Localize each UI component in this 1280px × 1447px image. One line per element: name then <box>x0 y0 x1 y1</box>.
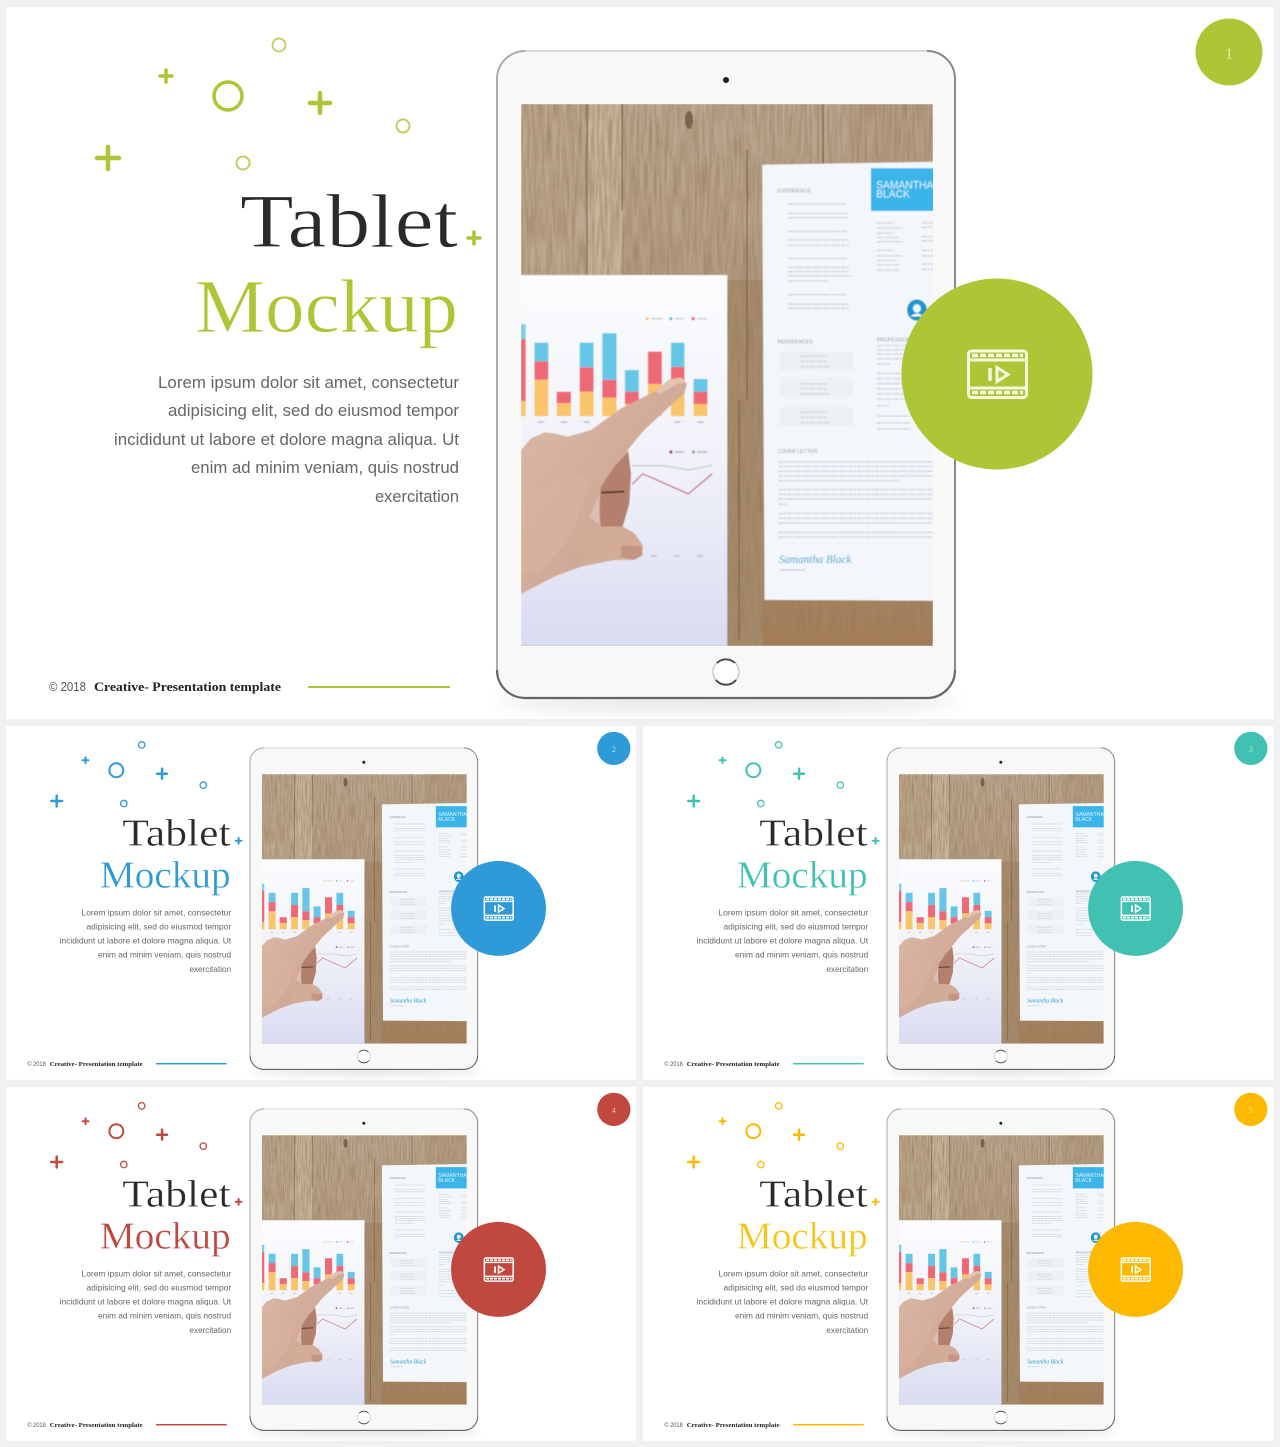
footer <box>49 679 450 694</box>
body text <box>697 907 869 974</box>
footer: Creative- Presentation template <box>687 1061 780 1068</box>
title: Mockup <box>737 855 868 897</box>
panel: teal slide <box>643 726 1273 1080</box>
panel: blue slide <box>6 726 636 1080</box>
title: Tablet <box>122 1173 231 1215</box>
title <box>100 1173 231 1258</box>
body text: adipisicing elit, sed do eiusmod tempor <box>87 921 231 931</box>
body text: adipisicing elit, sed do eiusmod tempor <box>724 921 868 931</box>
title: Tablet <box>122 812 231 854</box>
body text: Lorem ipsum dolor sit amet, consectetur <box>158 373 459 392</box>
page number badge <box>1234 732 1267 765</box>
title: Mockup <box>100 855 231 897</box>
body text: enim ad minim veniam, quis nostrud <box>98 1311 231 1321</box>
body text: exercitation <box>189 964 231 974</box>
footer: Creative- Presentation template <box>687 1422 780 1429</box>
body text: exercitation <box>375 487 459 506</box>
body text: exercitation <box>189 1325 231 1335</box>
body text: incididunt ut labore et dolore magna aliqua. Ut <box>60 936 232 946</box>
body text: incididunt ut labore et dolore magna aliqua. Ut <box>697 936 869 946</box>
play circle with film icon <box>902 278 1092 470</box>
page number badge: 3 <box>1249 745 1253 754</box>
page number badge <box>1196 18 1262 86</box>
tablet mockup <box>250 748 480 1076</box>
decorative circles and plus signs <box>51 742 242 844</box>
footer: Creative- Presentation template <box>50 1422 143 1429</box>
play circle with film icon <box>1088 1222 1183 1317</box>
body text: incididunt ut labore et dolore magna aliqua. Ut <box>114 430 459 449</box>
page number badge: 2 <box>612 745 616 754</box>
body text: exercitation <box>826 964 868 974</box>
tablet mockup <box>250 1109 480 1437</box>
play circle with film icon <box>451 1222 546 1317</box>
footer: © 2018 <box>49 679 86 694</box>
panel: yellow slide <box>643 1087 1273 1441</box>
panel: main green slide <box>6 7 1274 719</box>
footer: © 2018 <box>664 1060 683 1068</box>
body text <box>60 1268 232 1335</box>
tablet mockup <box>887 748 1117 1076</box>
body text: adipisicing elit, sed do eiusmod tempor <box>87 1282 231 1292</box>
page number badge: 4 <box>612 1106 616 1115</box>
title: Tablet <box>240 180 458 264</box>
footer <box>664 1060 864 1068</box>
title: Mockup <box>737 1216 868 1258</box>
body text: exercitation <box>826 1325 868 1335</box>
footer <box>664 1421 864 1429</box>
decorative circles and plus signs <box>97 38 480 244</box>
title <box>737 1173 868 1258</box>
body text: enim ad minim veniam, quis nostrud <box>735 950 868 960</box>
body text: adipisicing elit, sed do eiusmod tempor <box>724 1282 868 1292</box>
panel: red slide <box>6 1087 636 1441</box>
footer: © 2018 <box>664 1421 683 1429</box>
title: Tablet <box>759 1173 868 1215</box>
play circle with film icon <box>451 861 546 956</box>
decorative circles and plus signs <box>688 742 879 844</box>
footer: © 2018 <box>27 1421 46 1429</box>
title: Tablet <box>759 812 868 854</box>
title: Mockup <box>100 1216 231 1258</box>
title: Mockup <box>195 265 458 349</box>
body text: adipisicing elit, sed do eiusmod tempor <box>168 401 459 420</box>
decorative circles and plus signs <box>688 1103 879 1205</box>
body text: incididunt ut labore et dolore magna aliqua. Ut <box>697 1297 869 1307</box>
title <box>100 812 231 897</box>
body text <box>60 907 232 974</box>
footer: Creative- Presentation template <box>94 679 281 694</box>
footer: Creative- Presentation template <box>50 1061 143 1068</box>
title <box>195 180 458 349</box>
body text: Lorem ipsum dolor sit amet, consectetur <box>719 907 868 917</box>
body text <box>114 373 459 506</box>
footer <box>27 1060 227 1068</box>
body text: Lorem ipsum dolor sit amet, consectetur <box>82 907 231 917</box>
decorative circles and plus signs <box>51 1103 242 1205</box>
play circle with film icon <box>1088 861 1183 956</box>
page number badge: 1 <box>1225 46 1233 63</box>
body text: enim ad minim veniam, quis nostrud <box>98 950 231 960</box>
page number badge <box>597 1093 630 1126</box>
page number badge <box>1234 1093 1267 1126</box>
body text <box>697 1268 869 1335</box>
body text: incididunt ut labore et dolore magna aliqua. Ut <box>60 1297 232 1307</box>
tablet mockup <box>496 51 960 711</box>
page number badge <box>597 732 630 765</box>
page number badge: 5 <box>1249 1106 1253 1115</box>
body text: enim ad minim veniam, quis nostrud <box>735 1311 868 1321</box>
title <box>737 812 868 897</box>
body text: Lorem ipsum dolor sit amet, consectetur <box>719 1268 868 1278</box>
footer: © 2018 <box>27 1060 46 1068</box>
body text: enim ad minim veniam, quis nostrud <box>191 458 459 477</box>
tablet mockup <box>887 1109 1117 1437</box>
body text: Lorem ipsum dolor sit amet, consectetur <box>82 1268 231 1278</box>
footer <box>27 1421 227 1429</box>
